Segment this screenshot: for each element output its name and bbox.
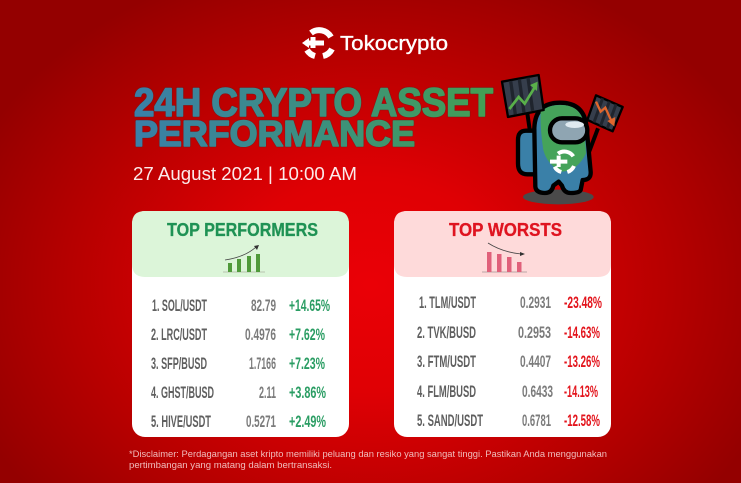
left sign stick [527,113,533,154]
row 2: 2. TVK/BUSD [417,323,476,342]
row 1: +14.65% [289,296,330,315]
mascot green shade [541,105,586,172]
row 1: 0.2931 [520,293,551,312]
heading: TOP PERFORMERS [167,220,318,240]
row 1: 1. TLM/USDT [419,293,476,312]
row 4: 0.6433 [522,382,553,401]
row 1: -23.48% [564,293,602,312]
row 1: 1. SOL/USDT [152,296,207,315]
row 4: -14.13% [564,382,598,401]
left sign with rising chart [502,75,544,117]
title: 24H CRYPTO ASSET [134,81,493,125]
date line: 27 August 2021 | 10:00 AM [133,164,357,184]
row 3: 3. SFP/BUSD [151,354,207,373]
row 2: 0.2953 [518,323,551,342]
row 2 [151,325,325,344]
mascot shadow [523,190,594,204]
title: PERFORMANCE [134,113,415,154]
row 5: 0.5271 [246,412,276,431]
row 5: 0.6781 [522,411,551,430]
panel header [132,211,349,277]
row 4 [151,383,326,402]
logo wordmark: Tokocrypto [340,33,448,55]
row 5: +2.49% [289,412,326,431]
right sign with falling chart [587,95,623,131]
row 3 [151,354,325,373]
panel: top worsts [394,211,611,437]
logo: Tokocrypto [302,30,448,56]
panel header [394,211,611,277]
row 2: 0.4976 [245,325,276,344]
row 3 [417,352,600,371]
row 5: -12.58% [564,411,600,430]
icon: Tokocrypto mark [302,30,332,56]
heading: TOP WORSTS [449,220,562,240]
panel: top performers [132,211,349,437]
row 4: 4. GHST/BUSD [151,383,214,402]
row 5: 5. HIVE/USDT [151,412,211,431]
row 1 [419,293,602,312]
row 3: +7.23% [289,354,325,373]
disclaimer: *Disclaimer: Perdagangan aset kripto memiliki peluang dan resiko yang sangat tinggi. Pastikan Anda menggunakan [129,449,607,459]
row 4 [417,382,598,401]
row 4: +3.86% [289,383,326,402]
panel body [132,211,349,437]
row 5 [417,411,600,430]
row 3: 1.7166 [249,354,276,373]
row 1: 82.79 [251,296,276,315]
panel body [394,211,611,437]
row 5: 5. SAND/USDT [417,411,483,430]
icon: falling bar chart [482,243,527,272]
right sign stick [587,128,598,158]
row 2: -14.63% [564,323,600,342]
row 3: -13.26% [564,352,600,371]
mascot backpack [518,131,536,174]
row 2: 2. LRC/USDT [151,325,207,344]
row 4: 2.11 [259,383,276,402]
mascot holding charts [502,75,623,204]
title [134,81,493,154]
disclaimer [129,449,607,470]
row 2: +7.62% [289,325,325,344]
row 1 [152,296,330,315]
mascot visor [550,118,587,142]
row 4: 4. FLM/BUSD [417,382,476,401]
row 3: 3. FTM/USDT [417,352,476,371]
mascot chest logo [550,152,574,172]
row 5 [151,412,326,431]
mascot body [534,103,591,193]
row 2 [417,323,600,342]
icon: rising bar chart [223,245,265,272]
disclaimer: pertimbangan yang matang dalam bertransaksi. [129,460,332,470]
row 3: 0.4407 [520,352,551,371]
